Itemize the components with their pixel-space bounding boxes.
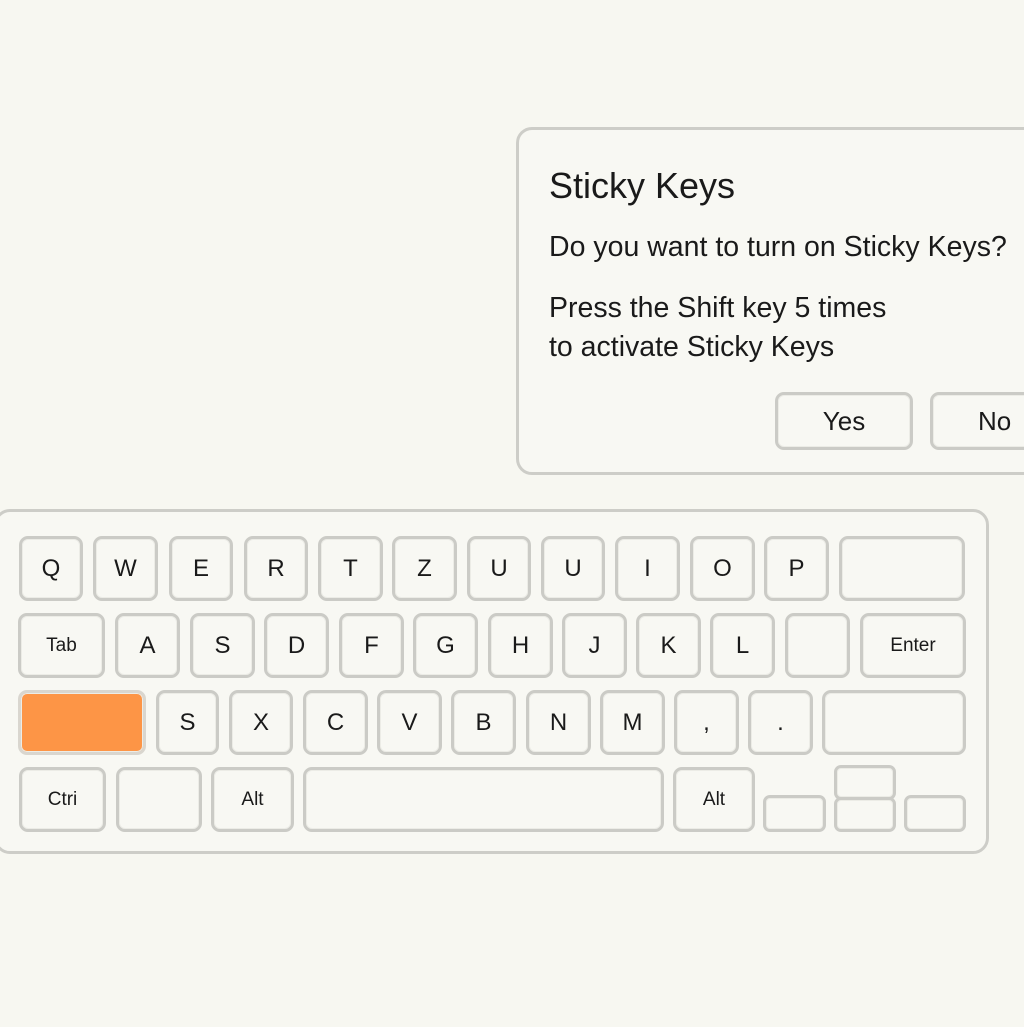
keyboard: N — [550, 708, 567, 736]
dialog title: Sticky Keys — [549, 165, 735, 206]
keyboard: V — [401, 708, 418, 736]
keyboard: . — [777, 708, 784, 736]
keyboard: W — [114, 554, 137, 582]
keyboard: H — [512, 632, 529, 658]
keyboard: T — [343, 554, 358, 582]
row 2 keys — [18, 613, 966, 678]
keyboard: G — [436, 632, 455, 658]
button: no — [930, 392, 1024, 450]
button: no: No — [978, 406, 1011, 436]
keyboard: , — [703, 708, 710, 736]
keyboard: A — [139, 632, 156, 658]
keyboard: B — [475, 708, 492, 736]
keyboard: K — [660, 632, 676, 658]
keyboard: Z — [417, 554, 432, 582]
keyboard: C — [327, 708, 344, 736]
question text: Do you want to turn on Sticky Keys? — [549, 231, 1007, 263]
keyboard: S — [214, 632, 230, 658]
keyboard: Alt — [241, 788, 264, 810]
keyboard: E — [193, 554, 209, 582]
instruction text: Press the Shift key 5 times — [549, 292, 886, 324]
keyboard: Enter — [890, 634, 936, 656]
instruction text — [549, 292, 886, 363]
keyboard: U — [564, 554, 582, 582]
keyboard: P — [788, 554, 804, 582]
keyboard: X — [253, 708, 269, 736]
keyboard: F — [364, 632, 379, 658]
row 1 keys — [19, 536, 965, 601]
keyboard: S — [179, 708, 196, 736]
instruction text: to activate Sticky Keys — [549, 331, 834, 363]
button: yes: Yes — [823, 406, 865, 436]
row 3 keys with highlighted shift — [18, 690, 966, 755]
keyboard: Q — [42, 554, 60, 582]
keyboard: Alt — [703, 788, 725, 810]
highlighted shift key — [18, 690, 146, 755]
keyboard: L — [736, 632, 749, 658]
keyboard: I — [644, 554, 651, 582]
keyboard: J — [588, 632, 600, 658]
keyboard: D — [288, 632, 305, 658]
keyboard: Ctri — [48, 788, 77, 810]
keyboard: M — [622, 708, 642, 736]
keyboard — [0, 509, 989, 854]
keyboard: O — [713, 554, 732, 582]
button: yes — [775, 392, 913, 450]
row 4 keys — [19, 765, 966, 832]
keyboard: U — [490, 554, 508, 582]
keyboard: R — [267, 554, 285, 582]
keyboard: Tab — [46, 634, 77, 656]
dialog: sticky keys — [516, 127, 1024, 475]
